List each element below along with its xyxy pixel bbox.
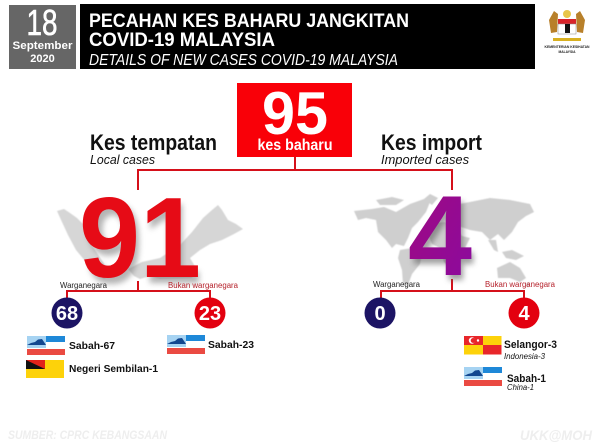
circle: 68 citizens: 68 bbox=[56, 303, 78, 325]
flag: Sabah, Sabah-1 bbox=[464, 367, 502, 386]
flag: Negeri Sembilan bbox=[26, 360, 64, 378]
heading: imported cases: Kes import bbox=[381, 130, 483, 155]
flag: Sabah, Sabah-67 bbox=[27, 336, 65, 355]
date box: 2020 bbox=[30, 53, 55, 65]
circle: 0 citizens: 0 bbox=[374, 303, 386, 325]
circle: 23 non-citizens bbox=[194, 298, 226, 328]
labels: citizens and non-citizens: Bukan warganegara bbox=[485, 280, 556, 289]
title banner: PECAHAN KES BAHARU JANGKITAN bbox=[89, 11, 409, 32]
text: Sabah-67: Sabah-67 bbox=[69, 340, 115, 352]
text: Sabah-1, China-1: Sabah-1 bbox=[507, 373, 546, 385]
logo: Ministry of Health crest bbox=[544, 10, 590, 54]
big number: 4 imported cases: 4 bbox=[412, 178, 474, 305]
big number: 91 local cases: 91 bbox=[79, 175, 201, 302]
big number: 4 imported cases: 4 bbox=[408, 173, 472, 300]
heading: local cases bbox=[90, 130, 217, 167]
labels: citizens and non-citizens: Warganegara bbox=[373, 280, 421, 289]
title banner bbox=[80, 4, 535, 69]
flag: Selangor bbox=[464, 336, 502, 354]
text: Sabah-1, China-1 bbox=[507, 373, 546, 392]
heading: imported cases bbox=[381, 130, 483, 167]
text: Selangor-3, Indonesia-3 bbox=[504, 339, 557, 361]
text: Sabah-1, China-1: China-1 bbox=[507, 383, 534, 392]
circle: 4 non-citizens bbox=[508, 298, 540, 328]
labels: citizens and non-citizens: Warganegara bbox=[60, 281, 108, 290]
connector lines bbox=[67, 157, 524, 298]
heading: imported cases: Imported cases bbox=[381, 152, 469, 167]
big number: 91 local cases: 91 bbox=[84, 181, 202, 308]
source note: SUMBER: CPRC KEBANGSAAN bbox=[8, 430, 168, 442]
date box: 18 bbox=[26, 2, 58, 43]
text: Sabah-23: Sabah-23 bbox=[208, 339, 254, 351]
logo: Ministry of Health crest: MALAYSIA bbox=[558, 49, 576, 54]
title banner: DETAILS OF NEW CASES COVID-19 MALAYSIA bbox=[89, 52, 398, 69]
map: Malaysia bbox=[57, 205, 243, 279]
date box bbox=[9, 2, 76, 69]
total box: 95 new cases bbox=[237, 80, 352, 157]
date box: September bbox=[12, 40, 73, 52]
circle: 4 non-citizens: 4 bbox=[518, 303, 530, 325]
labels: citizens and non-citizens: Bukan warganegara bbox=[168, 281, 239, 290]
circle: 0 citizens bbox=[364, 298, 396, 328]
total box: 95 new cases: 95 bbox=[262, 80, 328, 147]
total box: 95 new cases: kes baharu bbox=[258, 137, 332, 154]
credit: UKK@MOH bbox=[520, 427, 593, 443]
text: Negeri Sembilan-1: Negeri Sembilan-1 bbox=[69, 363, 158, 375]
circle: 23 non-citizens: 23 bbox=[199, 303, 221, 325]
circle: 68 citizens bbox=[52, 298, 82, 328]
logo: Ministry of Health crest: KEMENTERIAN KESIHATAN bbox=[544, 44, 590, 49]
text: Selangor-3, Indonesia-3: Indonesia-3 bbox=[504, 352, 546, 361]
map: world bbox=[354, 194, 534, 288]
labels: citizens and non-citizens bbox=[60, 280, 556, 290]
title banner: COVID-19 MALAYSIA bbox=[89, 30, 275, 51]
heading: local cases: Kes tempatan bbox=[90, 130, 217, 155]
heading: local cases: Local cases bbox=[90, 152, 155, 167]
flag: Sabah, Sabah-23 bbox=[167, 335, 205, 354]
text: Selangor-3, Indonesia-3: Selangor-3 bbox=[504, 339, 557, 351]
